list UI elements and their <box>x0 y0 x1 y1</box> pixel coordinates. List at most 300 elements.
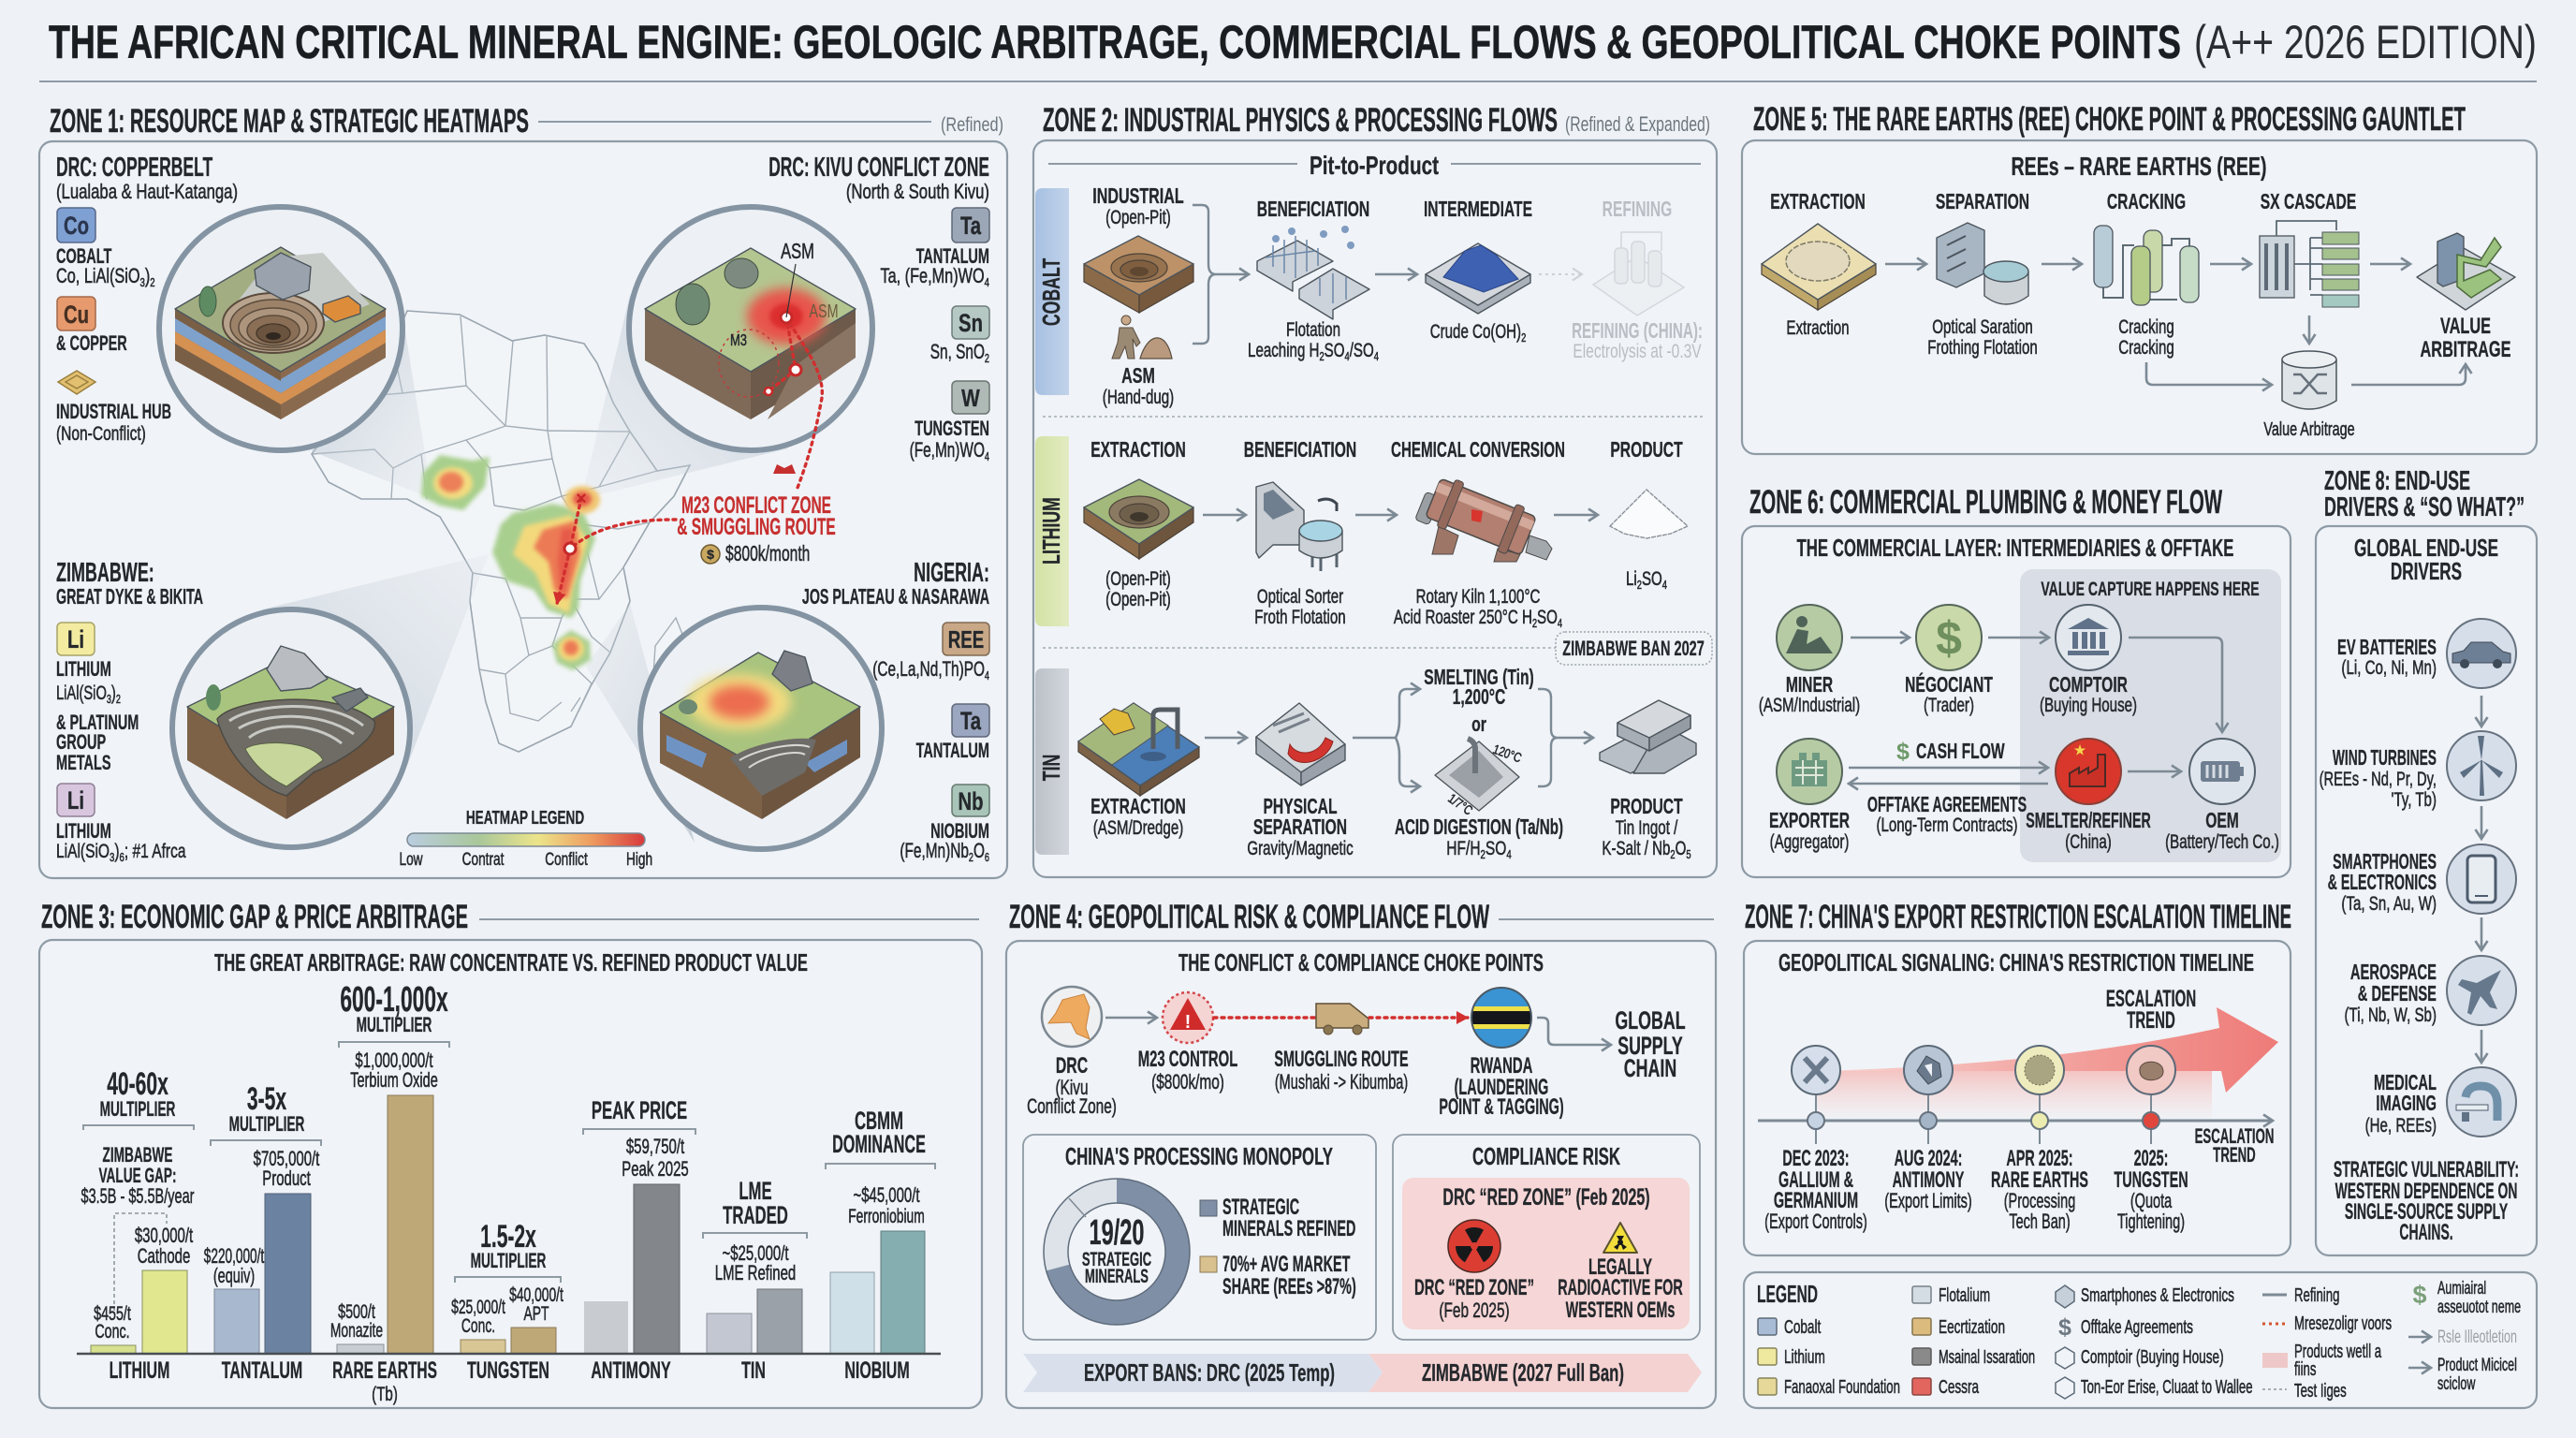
lithium: product: 4 <box>1662 580 1667 592</box>
tab: tin <box>1035 668 1069 855</box>
legend: column 5: Product Micicel <box>2437 1355 2517 1375</box>
inset: Kivu: M3 <box>730 331 747 350</box>
tin: smelting or acid digestion: HF/H <box>1446 837 1481 859</box>
cash flow arrow and label <box>1849 739 2048 768</box>
global supply chain: CHAIN <box>1624 1053 1676 1082</box>
driver: wind turbines: WIND TURBINES <box>2333 747 2437 770</box>
legend: column 2: Msainal Issaration <box>1939 1346 2035 1368</box>
left labels: Zimbabwe: & PLATINUM <box>56 711 139 734</box>
step: separation <box>1927 190 2038 359</box>
driver: medical imaging: (He, REEs) <box>2365 1113 2437 1137</box>
right labels: DRC Kivu: Sn, SnO <box>930 341 985 364</box>
panel: zone 5 rare earths <box>1742 140 2537 454</box>
callout: tungsten 1.5-2x: APT <box>524 1302 549 1325</box>
cash flow arrow and label: CASH FLOW <box>1916 740 2005 764</box>
dotted arrow to refining <box>1539 273 1582 275</box>
event: 2025 tungsten: TUNGSTEN <box>2114 1167 2188 1193</box>
node: DRC: Conflict Zone) <box>1027 1095 1117 1119</box>
callout: tantalum 3-5x <box>204 1080 321 1287</box>
inset: Copperbelt <box>159 207 402 450</box>
callout: antimony peak price: Peak 2025 <box>622 1157 689 1181</box>
left labels: Zimbabwe: METALS <box>56 751 111 774</box>
right labels: Nigeria <box>802 558 989 864</box>
lithium: product: 2 <box>1637 580 1642 592</box>
right labels: DRC Kivu: TUNGSTEN <box>915 417 989 440</box>
panel: legend <box>1744 1272 2537 1408</box>
node: smelter refiner: ★ <box>2074 742 2086 757</box>
tin: smelting or acid digestion: SO <box>1486 837 1506 859</box>
category labels: RARE EARTHS <box>332 1357 437 1384</box>
lithium: beneficiation: BENEFICIATION <box>1244 438 1356 462</box>
global supply chain: SUPPLY <box>1617 1031 1683 1060</box>
cobalt: mining sources <box>1084 184 1249 408</box>
tin: smelting or acid digestion: 4 <box>1506 849 1512 861</box>
right labels: Nigeria: 6 <box>985 852 989 864</box>
event: Aug 2024: (Export Limits) <box>1884 1189 1972 1212</box>
right labels: Nigeria: 2 <box>969 852 973 864</box>
lithium: product: PRODUCT <box>1610 438 1683 462</box>
heatmap: Nigeria <box>421 455 490 510</box>
panel: compliance risk: DRC “RED ZONE” (Feb 2025) <box>1442 1185 1650 1211</box>
cash flow arrow and label: $ <box>1896 739 1910 765</box>
cobalt: beneficiation: 4 <box>1374 351 1379 363</box>
step: value arbitrage: VALUE <box>2440 314 2491 339</box>
strategic vulnerability note: CHAINS. <box>2399 1220 2453 1245</box>
heatmap: Zimbabwe <box>552 630 591 670</box>
escalation arrow: ESCALATION <box>2106 986 2196 1012</box>
left labels: Zimbabwe: GROUP <box>56 730 106 754</box>
cobalt: intermediate: INTERMEDIATE <box>1424 198 1532 222</box>
left labels: Zimbabwe: 3 <box>110 852 114 864</box>
right labels: DRC Kivu: Ta, (Fe,Mn)WO <box>880 265 985 288</box>
inset: Kivu: ASM <box>809 301 839 322</box>
node: smelter refiner: SMELTER/REFINER <box>2026 810 2151 833</box>
callout: tantalum 3-5x: Product <box>262 1167 311 1190</box>
left labels: Zimbabwe: LITHIUM <box>56 819 111 843</box>
left labels: Zimbabwe: GREAT DYKE & BIKITA <box>56 586 203 609</box>
arrow <box>2481 696 2482 726</box>
callout: tin LME traded: ~$25,000/t <box>722 1241 789 1265</box>
callout: M23 conflict zone: & SMUGGLING ROUTE <box>677 514 836 540</box>
driver: smartphones: SMARTPHONES <box>2333 851 2437 874</box>
inset: Kivu <box>629 207 872 488</box>
bars: tungsten <box>461 1328 556 1354</box>
node: Rwanda: (LAUNDERING <box>1455 1075 1548 1100</box>
zone 8 heading <box>2324 466 2525 522</box>
right labels: Nigeria: (Ce,La,Nd,Th)PO <box>872 658 985 682</box>
heatmap legend <box>399 807 652 870</box>
strategic vulnerability note <box>2334 1157 2519 1245</box>
lithium: chemical conversion: 2 <box>1532 618 1537 630</box>
callout: tantalum 3-5x: MULTIPLIER <box>229 1112 304 1136</box>
step: extraction: Extraction <box>1786 315 1850 339</box>
driver: smartphones: (Ta, Sn, Au, W) <box>2341 891 2437 915</box>
cobalt: beneficiation: 4 <box>1345 351 1350 363</box>
category labels: NIOBIUM <box>844 1358 910 1384</box>
tin: product: PRODUCT <box>1610 795 1683 819</box>
callout: antimony peak price: $59,750/t <box>626 1135 685 1158</box>
driver: wind turbines: (REEs - Nd, Pr, Dy, <box>2320 768 2437 790</box>
left labels: Zimbabwe: LiAl(SiO <box>56 682 107 704</box>
icon: hazard triangle <box>1603 1223 1637 1253</box>
value arbitrage cylinder <box>2263 351 2355 440</box>
arrow <box>1885 263 1926 265</box>
event: Apr 2025: (Processing <box>2004 1189 2075 1212</box>
legend: column 3: Comptoir (Buying House) <box>2081 1346 2224 1368</box>
callout: M23 conflict zone: $ <box>707 547 714 562</box>
arrow <box>2128 770 2181 772</box>
zone 3 heading: ZONE 3: ECONOMIC GAP & PRICE ARBITRAGE <box>41 899 468 935</box>
cobalt: intermediate: 2 <box>1521 332 1526 345</box>
cobalt: beneficiation: /SO <box>1350 338 1374 361</box>
callout: lithium 40-60x <box>81 1065 194 1343</box>
lithium: chemical conversion: CHEMICAL CONVERSION <box>1391 438 1565 462</box>
zone 8 heading: ZONE 8: END-USE <box>2324 466 2470 496</box>
node: miner <box>1759 605 1860 716</box>
left labels: Zimbabwe: ) <box>114 840 120 862</box>
tin: smelting or acid digestion: 120°C <box>1491 742 1523 766</box>
tab: lithium: LITHIUM <box>1038 497 1065 565</box>
tin: product: K-Salt / Nb <box>1602 836 1670 859</box>
node: OEM: OEM <box>2205 809 2239 833</box>
callout: lithium 40-60x: MULTIPLIER <box>100 1097 175 1121</box>
strategic vulnerability note: SINGLE-SOURCE SUPPLY <box>2345 1199 2508 1225</box>
left labels: DRC Copperbelt: DRC: COPPERBELT <box>56 153 213 183</box>
step: SX cascade <box>2260 190 2359 307</box>
left labels: DRC Copperbelt: 3 <box>140 277 145 289</box>
tin: smelting or acid digestion: SMELTING (Tin) <box>1424 666 1534 690</box>
legend: column 2: Eecrtization <box>1939 1316 2005 1338</box>
arrow <box>1355 514 1397 516</box>
legend: column 4: Test Iiges <box>2294 1380 2347 1401</box>
callout: rare earths 600-1000x: Terbium Oxide <box>350 1068 438 1092</box>
panel: compliance risk: (Feb 2025) <box>1439 1299 1510 1323</box>
global supply chain: GLOBAL <box>1615 1005 1686 1034</box>
tab: cobalt <box>1035 188 1069 395</box>
tin: smelting or acid digestion <box>1395 666 1563 861</box>
callout: tungsten 1.5-2x: Conc. <box>461 1314 495 1337</box>
chevron: Zimbabwe ban: ZIMBABWE (2027 Full Ban) <box>1422 1358 1624 1387</box>
flow: cylinder to value <box>2351 364 2466 385</box>
left labels: Zimbabwe <box>56 558 203 864</box>
arrow to global supply chain <box>1537 1018 1611 1045</box>
heatmap legend: HEATMAP LEGEND <box>466 807 584 829</box>
cobalt: beneficiation: 2 <box>1319 351 1325 363</box>
callout: lithium 40-60x: $3.5B - $5.5B/year <box>81 1184 194 1208</box>
tin: smelting or acid digestion: 1,200°C <box>1453 685 1505 710</box>
callout: tungsten 1.5-2x <box>451 1218 564 1337</box>
lithium: beneficiation: Froth Flotation <box>1254 605 1346 628</box>
callout: rare earths 600-1000x: Monazite <box>330 1319 383 1342</box>
driver: aerospace: & DEFENSE <box>2358 983 2437 1006</box>
right labels: Nigeria: JOS PLATEAU & NASARAWA <box>802 586 989 609</box>
callout: M23 conflict zone: M23 CONFLICT ZONE <box>681 492 831 519</box>
right labels: Nigeria: Nb <box>959 787 983 816</box>
arrow <box>2042 263 2082 265</box>
callout: niobium CBMM dominance: CBMM <box>855 1107 903 1135</box>
lithium: extraction: EXTRACTION <box>1090 438 1186 462</box>
left labels: Zimbabwe: Li <box>67 625 84 654</box>
right labels: DRC Kivu: W <box>961 385 981 412</box>
right labels: Nigeria: (Fe,Mn)Nb <box>900 840 969 863</box>
legend: column 2 <box>1912 1284 2035 1398</box>
driver: smartphones: & ELECTRONICS <box>2328 872 2437 895</box>
cobalt: beneficiation: Flotation <box>1286 317 1340 341</box>
down arrow to cylinder <box>2308 315 2310 344</box>
right labels: DRC Kivu: 4 <box>985 277 990 289</box>
driver: smartphones <box>2328 844 2516 915</box>
cobalt: refining ghost: REFINING (CHINA): <box>1572 319 1703 344</box>
arrow <box>1203 514 1246 516</box>
panel: zone 8 end-use drivers <box>2316 526 2537 1255</box>
tin: physical separation: PHYSICAL <box>1263 795 1338 819</box>
node: exporter: EXPORTER <box>1769 809 1850 833</box>
node: M23 control: ! <box>1185 1012 1191 1033</box>
arrow <box>2370 263 2410 265</box>
arrow <box>1205 737 1247 739</box>
donut legend: STRATEGIC <box>1222 1195 1299 1220</box>
inset: Jos Plateau <box>640 608 882 849</box>
driver: aerospace <box>2345 956 2516 1026</box>
category labels: TIN <box>741 1358 766 1384</box>
conflict routes <box>557 489 676 604</box>
category labels: LITHIUM <box>110 1358 169 1384</box>
inset: Kivu: ASM <box>781 240 814 264</box>
category labels <box>110 1357 910 1405</box>
zone 4 heading: ZONE 4: GEOPOLITICAL RISK & COMPLIANCE FLOW <box>1009 899 1489 935</box>
left labels: DRC Copperbelt <box>56 153 238 445</box>
heatmap legend: High <box>626 849 652 870</box>
panel: compliance risk: DRC “RED ZONE” <box>1414 1276 1534 1300</box>
legend: column 4: Mresezoligr voors <box>2294 1313 2392 1334</box>
lithium: chemical conversion <box>1391 438 1565 630</box>
left labels: Zimbabwe: 2 <box>116 694 121 706</box>
driver: aerospace: AEROSPACE <box>2350 961 2437 985</box>
node: comptoir: COMPTOIR <box>2049 673 2128 697</box>
donut chart <box>1044 1179 1190 1325</box>
node: OEM <box>2165 739 2279 853</box>
lithium: chemical conversion: Acid Roaster 250°C H <box>1394 605 1532 628</box>
step: extraction: EXTRACTION <box>1770 190 1866 214</box>
callout: tungsten 1.5-2x: 1.5-2x <box>480 1218 536 1254</box>
bars: antimony <box>584 1184 680 1354</box>
lithium: extraction <box>1084 438 1193 610</box>
panel title: GEOPOLITICAL SIGNALING: CHINA'S RESTRICTION TIMELINE <box>1778 948 2254 976</box>
step: separation: Frothing Flotation <box>1927 335 2038 359</box>
panel subtitle: pit to product: Pit-to-Product <box>1310 151 1439 180</box>
lithium: extraction: (Open-Pit) <box>1105 566 1171 590</box>
conflict routes: × <box>576 489 587 509</box>
legend: column 3: $ <box>2058 1314 2071 1341</box>
heatmap legend: Contrat <box>462 849 505 870</box>
right labels: DRC Kivu: Ta <box>960 212 982 241</box>
node: M23 control: ($800k/mo) <box>1151 1071 1224 1094</box>
node: smuggling route van: SMUGGLING ROUTE <box>1274 1047 1409 1072</box>
arrow <box>2481 806 2482 839</box>
zone 2 heading: ZONE 2: INDUSTRIAL PHYSICS & PROCESSING FLOWS <box>1043 102 1558 139</box>
left labels: Zimbabwe: LITHIUM <box>56 657 111 681</box>
legend: column 4: fiins <box>2294 1358 2316 1380</box>
donut chart: STRATEGIC <box>1082 1248 1151 1270</box>
node: miner: (ASM/Industrial) <box>1759 693 1860 716</box>
callout: tin LME traded <box>703 1177 807 1284</box>
lithium: product: SO <box>1642 566 1662 590</box>
bars: tin <box>707 1289 802 1354</box>
callout: lithium 40-60x: VALUE GAP: <box>98 1164 177 1187</box>
event: Apr 2025: RARE EARTHS <box>1991 1167 2088 1193</box>
bars: rare earths <box>337 1095 433 1354</box>
bars: niobium <box>830 1231 925 1354</box>
donut legend: SHARE (REEs >87%) <box>1222 1274 1356 1299</box>
panel: zone 7 timeline <box>1744 941 2291 1255</box>
callout: antimony peak price <box>583 1096 695 1181</box>
event: 2025 tungsten: 2025: <box>2134 1146 2168 1171</box>
legend: column 5: asseuotot neme <box>2437 1297 2521 1317</box>
driver: wind turbines <box>2320 731 2516 811</box>
callout: tantalum 3-5x: $705,000/t <box>254 1147 320 1170</box>
left labels: DRC Copperbelt: Cu <box>64 301 89 330</box>
event: 2025 tungsten <box>2114 1046 2188 1233</box>
callout: antimony peak price: PEAK PRICE <box>592 1096 687 1124</box>
strategic vulnerability note: STRATEGIC VULNERABILITY: <box>2334 1157 2519 1182</box>
driver: EV batteries <box>2337 619 2516 688</box>
left labels: Zimbabwe: ) <box>111 682 116 704</box>
category labels: TANTALUM <box>222 1358 302 1384</box>
panel: China's processing monopoly: CHINA'S PROCESSING MONOPOLY <box>1065 1142 1333 1170</box>
left labels: DRC Copperbelt: 2 <box>150 277 155 289</box>
callout: M23 conflict zone: $800k/month <box>725 542 810 566</box>
callout: niobium CBMM dominance: DOMINANCE <box>832 1130 926 1158</box>
tin: smelting or acid digestion: 2 <box>1481 849 1486 861</box>
callout: tungsten 1.5-2x: $40,000/t <box>509 1284 564 1306</box>
tin: extraction: (ASM/Dredge) <box>1093 815 1183 839</box>
arrow <box>1851 637 1910 638</box>
step: separation: SEPARATION <box>1936 190 2029 214</box>
flow: cracking to cylinder <box>2146 362 2272 385</box>
node: smelter refiner: (China) <box>2065 829 2112 853</box>
node: Rwanda: RWANDA <box>1471 1054 1532 1078</box>
node: OEM: (Battery/Tech Co.) <box>2165 829 2279 853</box>
node: comptoir <box>2040 605 2137 716</box>
event: Dec 2023: GALLIUM & <box>1778 1167 1853 1193</box>
right labels: Nigeria: 4 <box>985 670 989 682</box>
bar chart <box>77 1095 941 1405</box>
event: Dec 2023: DEC 2023: <box>1782 1146 1850 1171</box>
legend: column 2: Flotalium <box>1939 1284 1990 1306</box>
tin: extraction: EXTRACTION <box>1090 795 1186 819</box>
timeline axis: TREND <box>2213 1144 2256 1167</box>
cobalt: mining sources: (Hand-dug) <box>1103 385 1174 408</box>
callout: rare earths 600-1000x <box>330 979 449 1342</box>
callout: tantalum 3-5x: $220,000/t <box>204 1244 264 1268</box>
heatmap: Kivu / Uganda <box>564 486 600 514</box>
heatmap legend: Low <box>399 849 423 870</box>
event: Apr 2025: APR 2025: <box>2006 1146 2073 1171</box>
legend: column 5: Rsle Illeotletion <box>2437 1327 2517 1347</box>
step: value arbitrage: ARBITRAGE <box>2421 337 2510 362</box>
callout: tin LME traded: TRADED <box>723 1201 788 1229</box>
node: M23 control <box>1138 992 1237 1094</box>
node: negociant: $ <box>1936 612 1962 665</box>
right labels: Nigeria: REE <box>948 625 984 653</box>
lithium: chemical conversion: 4 <box>1558 618 1562 630</box>
legend: column 2: Cessra <box>1939 1376 1979 1398</box>
step: extraction <box>1762 190 1876 339</box>
inset: Great Dyke <box>172 609 410 847</box>
step: cracking <box>2094 190 2199 359</box>
escalation arrow: TREND <box>2127 1007 2175 1034</box>
driver: EV batteries: EV BATTERIES <box>2337 637 2437 660</box>
tin: smelting or acid digestion: 1/7°C <box>1445 791 1475 818</box>
event: Aug 2024: AUG 2024: <box>1895 1146 1962 1171</box>
left labels: Zimbabwe: 3 <box>107 694 111 706</box>
callout: lithium 40-60x: Conc. <box>95 1320 130 1343</box>
tab: lithium <box>1035 436 1069 626</box>
left labels: Zimbabwe: ; #1 Afrca <box>124 840 186 862</box>
step: cracking: Cracking <box>2118 335 2174 359</box>
left labels: DRC Copperbelt: INDUSTRIAL HUB <box>56 400 171 423</box>
tab: cobalt: COBALT <box>1038 258 1065 326</box>
legend: column 4: Refining <box>2294 1284 2339 1306</box>
left labels: Zimbabwe: Li <box>67 786 84 815</box>
legend: column 3: Smartphones & Electronics <box>2081 1284 2234 1306</box>
cobalt: mining sources: ASM <box>1121 364 1155 389</box>
escalation arrow <box>1815 986 2278 1121</box>
offtake arrow and label <box>1849 784 2048 836</box>
zone 2 heading: (Refined & Expanded) <box>1565 112 1710 136</box>
driver: aerospace: (Ti, Nb, W, Sb) <box>2345 1003 2437 1026</box>
category labels: (Tb) <box>372 1382 398 1405</box>
left labels: DRC Copperbelt: & COPPER <box>56 331 127 355</box>
left labels: Zimbabwe: ZIMBABWE: <box>56 558 154 588</box>
tin: product: O <box>1676 836 1686 859</box>
step: SX cascade: SX CASCADE <box>2261 190 2356 214</box>
zone 1 heading: ZONE 1: RESOURCE MAP & STRATEGIC HEATMAPS <box>50 103 529 139</box>
callout: rare earths 600-1000x: $1,000,000/t <box>355 1049 433 1072</box>
donut chart: MINERALS <box>1085 1265 1149 1287</box>
arrow <box>2210 263 2251 265</box>
left labels: Zimbabwe: LiAl(SiO <box>56 840 110 862</box>
lithium: product <box>1610 438 1688 592</box>
callout: rare earths 600-1000x: $500/t <box>338 1300 375 1323</box>
driver: medical imaging: IMAGING <box>2376 1093 2437 1116</box>
chevron: DRC export ban: EXPORT BANS: DRC (2025 Temp) <box>1084 1358 1335 1387</box>
strategic vulnerability note: WESTERN DEPENDENCE ON <box>2335 1179 2517 1204</box>
lithium: chemical conversion: Rotary Kiln 1,100°C <box>1416 584 1540 608</box>
left labels: DRC Copperbelt: (Lualaba & Haut-Katanga) <box>56 181 238 204</box>
step: separation: Optical Saration <box>1932 315 2033 338</box>
right labels: DRC Kivu: Sn <box>959 309 983 338</box>
callout: lithium 40-60x: $455/t <box>94 1302 131 1325</box>
cobalt: mining sources: INDUSTRIAL <box>1092 184 1184 209</box>
callout: rare earths 600-1000x: 600-1,000x <box>340 979 448 1019</box>
legend: column 4 <box>2262 1284 2392 1401</box>
lithium: beneficiation: Optical Sorter <box>1257 584 1343 608</box>
step: value arbitrage <box>2417 233 2515 362</box>
legend: column 1: Fanaoxal Foundation <box>1784 1376 1900 1398</box>
dotted route <box>1214 1016 1314 1020</box>
left labels: DRC Copperbelt: Co <box>64 212 89 241</box>
map: Africa outline with borders <box>312 311 690 752</box>
callout: tantalum 3-5x: 3-5x <box>247 1080 286 1116</box>
offtake arrow and label: OFFTAKE AGREEMENTS <box>1867 794 2027 817</box>
cobalt: refining ghost: REFINING <box>1603 198 1672 222</box>
tin: physical separation <box>1247 703 1354 859</box>
step: cracking: Cracking <box>2118 315 2174 338</box>
callout: lithium 40-60x: $30,000/t <box>135 1224 194 1247</box>
event: Apr 2025 <box>1991 1046 2088 1233</box>
node: DRC: (Kivu <box>1055 1077 1089 1100</box>
